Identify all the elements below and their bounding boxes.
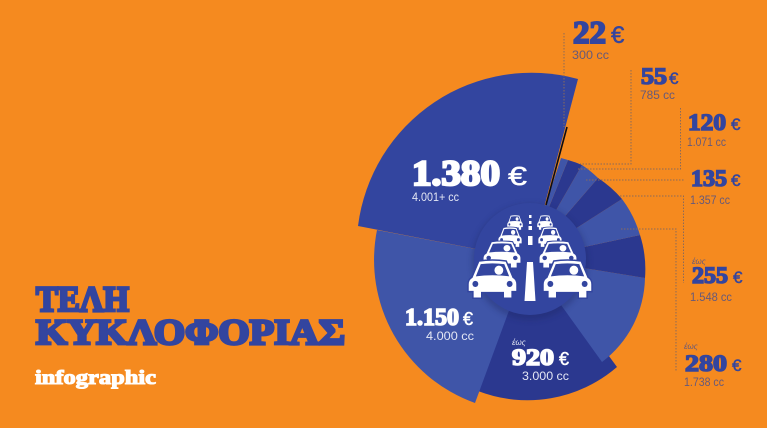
label: 1.150 euro: 1.150 — [405, 305, 459, 331]
sector: 1150 euro — [374, 230, 528, 403]
label: 120 euro: € — [731, 115, 741, 134]
label: 55 euro: 55 — [641, 64, 667, 89]
label: 280 euro: € — [732, 356, 742, 375]
dotted leader lines — [564, 33, 684, 372]
label: 280 euro: 1.738 cc — [684, 377, 724, 389]
title — [36, 279, 345, 352]
label: 255 euro: 255 — [692, 263, 728, 288]
label: 280 euro: 280 — [685, 351, 727, 376]
label: 280 euro: έως — [684, 342, 698, 351]
centre circle with traffic icon — [468, 203, 592, 320]
icon: left cars — [468, 215, 523, 298]
label: 22 euro: 300 cc — [572, 50, 609, 62]
icon: right cars — [537, 215, 592, 298]
icon: road markings — [524, 215, 536, 301]
label: 1.150 euro — [405, 305, 474, 343]
title: ΤΕΛΗ — [36, 279, 129, 319]
sector: 255 euro — [528, 235, 645, 278]
label: 120 euro: 120 — [688, 110, 726, 135]
radial chart — [358, 73, 645, 403]
label: 1.150 euro: 4.000 cc — [426, 331, 474, 343]
label: 280 euro — [684, 342, 742, 389]
label: 255 euro: έως — [692, 257, 706, 266]
title: ΚΥΚΛΟΦΟΡΙΑΣ — [36, 312, 345, 352]
sector: 135 euro — [528, 199, 640, 259]
label: 920 euro — [512, 338, 569, 383]
sector: 55 euro — [528, 165, 598, 259]
label: 135 euro: 135 — [691, 166, 727, 191]
label: 120 euro — [687, 110, 741, 149]
label: 135 euro: 1.357 cc — [690, 195, 730, 207]
label: 55 euro: 785 cc — [640, 90, 675, 102]
label: 135 euro — [690, 166, 741, 207]
label: 1.380 euro: 4.001+ cc — [412, 192, 459, 204]
label: 55 euro — [640, 64, 679, 102]
label: 255 euro: € — [733, 268, 743, 287]
label: 120 euro: 1.071 cc — [687, 137, 726, 149]
sector: 280 euro — [528, 259, 645, 362]
label: 22 euro — [572, 14, 625, 62]
label: 135 euro: € — [731, 171, 741, 190]
label: 1.380 euro: 1.380 — [412, 153, 500, 193]
sector: 1380 euro — [358, 73, 578, 259]
black divider line — [546, 127, 567, 205]
label: 55 euro: € — [669, 69, 679, 88]
label: 22 euro: € — [611, 22, 625, 49]
sector: 120 euro — [528, 178, 622, 259]
sector: 920 euro — [478, 259, 617, 400]
label: 255 euro: 1.548 cc — [690, 292, 732, 304]
brand: infographic: infographic — [35, 367, 156, 389]
label: 22 euro: 22 — [573, 14, 606, 50]
sector: small dark — [528, 160, 582, 259]
label: 1.150 euro: € — [463, 309, 473, 329]
label: 255 euro — [690, 257, 743, 304]
label: 920 euro: 920 — [512, 345, 554, 370]
label: 920 euro: € — [559, 349, 569, 369]
label: 1.380 euro — [412, 153, 528, 204]
label: 920 euro: έως — [512, 338, 526, 347]
label: 1.380 euro: € — [508, 161, 528, 191]
label: 920 euro: 3.000 cc — [522, 371, 569, 383]
sector: 22 euro — [528, 158, 568, 259]
